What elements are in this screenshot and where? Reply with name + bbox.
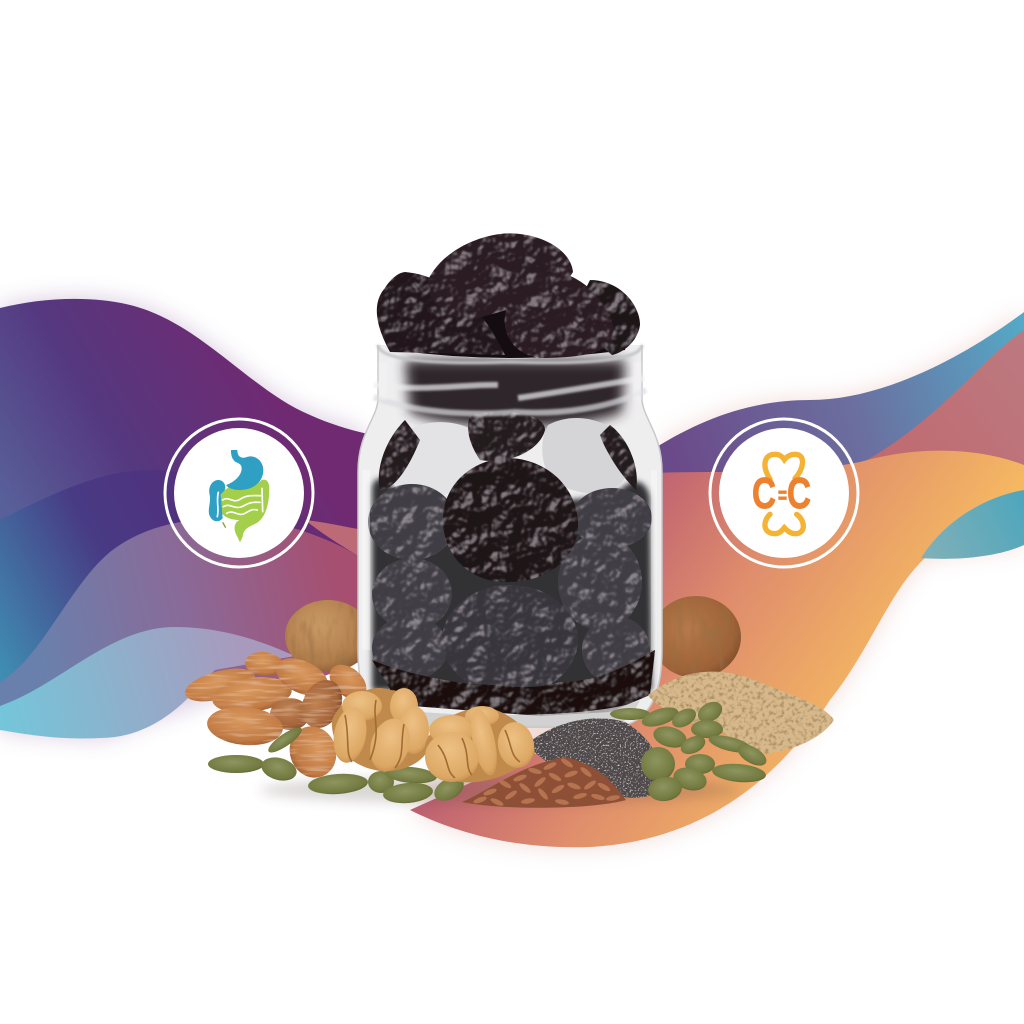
badge ring: [710, 419, 858, 567]
seed: [382, 781, 434, 805]
badge disc: [719, 428, 849, 558]
jar base: [385, 700, 640, 728]
flax pile: [462, 757, 626, 808]
glass jar of prunes: [358, 233, 662, 728]
seed: [265, 724, 305, 756]
seed: [691, 720, 723, 738]
almond: [294, 673, 350, 735]
seed: [259, 754, 299, 784]
bone outline: [765, 454, 803, 534]
walnut right: [651, 596, 741, 678]
pumpkin seeds left group: [208, 724, 468, 806]
almonds: [182, 650, 373, 784]
jar glass backing: [358, 345, 662, 727]
badge disc: [174, 428, 304, 558]
bond label: =: [778, 483, 787, 508]
seed: [711, 762, 767, 784]
seed: [651, 723, 689, 751]
walnut left: [285, 600, 371, 672]
wave: top purple: [0, 299, 368, 560]
prune centre front: [443, 458, 578, 582]
wave: orange sweep: [410, 451, 1024, 847]
dark underlay between top prunes: [395, 300, 630, 358]
almond: [244, 650, 284, 678]
right wave layers: [410, 312, 1024, 847]
walnut half right: [425, 706, 538, 782]
bottom dark prune band: [372, 650, 655, 716]
wave: mauve: [0, 518, 364, 712]
badge ring: [165, 419, 313, 567]
jar rim and threads: [374, 345, 646, 413]
bond label: C: [787, 469, 811, 518]
almond: [270, 651, 334, 703]
almond: [282, 720, 344, 784]
icon: digestive system badge: [165, 419, 313, 567]
seed: [430, 772, 468, 806]
seed: [208, 755, 264, 773]
upper prunes through glass: [379, 412, 637, 490]
wave: light blue: [0, 627, 295, 738]
almond: [205, 704, 285, 748]
almond: [210, 673, 294, 717]
wave: teal blob: [921, 490, 1024, 559]
dark backing behind lower prunes: [372, 478, 652, 690]
light glass patch right: [542, 418, 628, 493]
seed: [646, 775, 684, 803]
icon: bone with C=C badge: [710, 419, 858, 567]
almond: [323, 658, 373, 706]
prunes inside jar: [368, 360, 655, 716]
quinoa pile: [648, 672, 834, 754]
seed: [678, 732, 708, 758]
left wave layers: [0, 299, 368, 738]
seed: [307, 772, 369, 796]
flax base: [462, 757, 626, 808]
almond: [270, 698, 310, 730]
prunes above rim: [377, 233, 640, 358]
infographic canvas: [0, 233, 1024, 856]
wave: rose: [860, 330, 1024, 480]
wave: blue violet: [655, 312, 1024, 500]
ground shadow: [260, 776, 740, 804]
walnut halves: [329, 688, 538, 782]
seed: [368, 771, 394, 793]
seed: [384, 765, 438, 785]
seed: [694, 698, 726, 726]
seed: [639, 704, 681, 730]
digestive organs: [209, 450, 269, 542]
light glass patch left: [394, 422, 483, 494]
seed: [707, 732, 753, 756]
wave: pink sliver: [305, 520, 364, 560]
pumpkin seeds right group: [610, 698, 770, 803]
seed: [669, 705, 699, 731]
almond: [182, 662, 258, 708]
seed: [734, 740, 770, 770]
chia pile: [526, 718, 660, 798]
seed: [671, 764, 709, 794]
whole walnuts behind jar: [285, 596, 741, 678]
seed: [685, 754, 715, 774]
seed: [610, 708, 650, 720]
bond label: [752, 469, 811, 518]
flax seed details: [473, 757, 620, 807]
seed: [641, 747, 675, 781]
wave: dark indigo: [0, 470, 368, 690]
jar outline: [358, 345, 662, 727]
glass side highlights: [366, 470, 654, 650]
bond label: C: [752, 469, 776, 518]
neck dark shape behind glass: [405, 360, 625, 427]
walnut half left: [329, 688, 430, 777]
soft glow around waves: [0, 299, 1024, 847]
grey prunes lower: [368, 484, 652, 695]
